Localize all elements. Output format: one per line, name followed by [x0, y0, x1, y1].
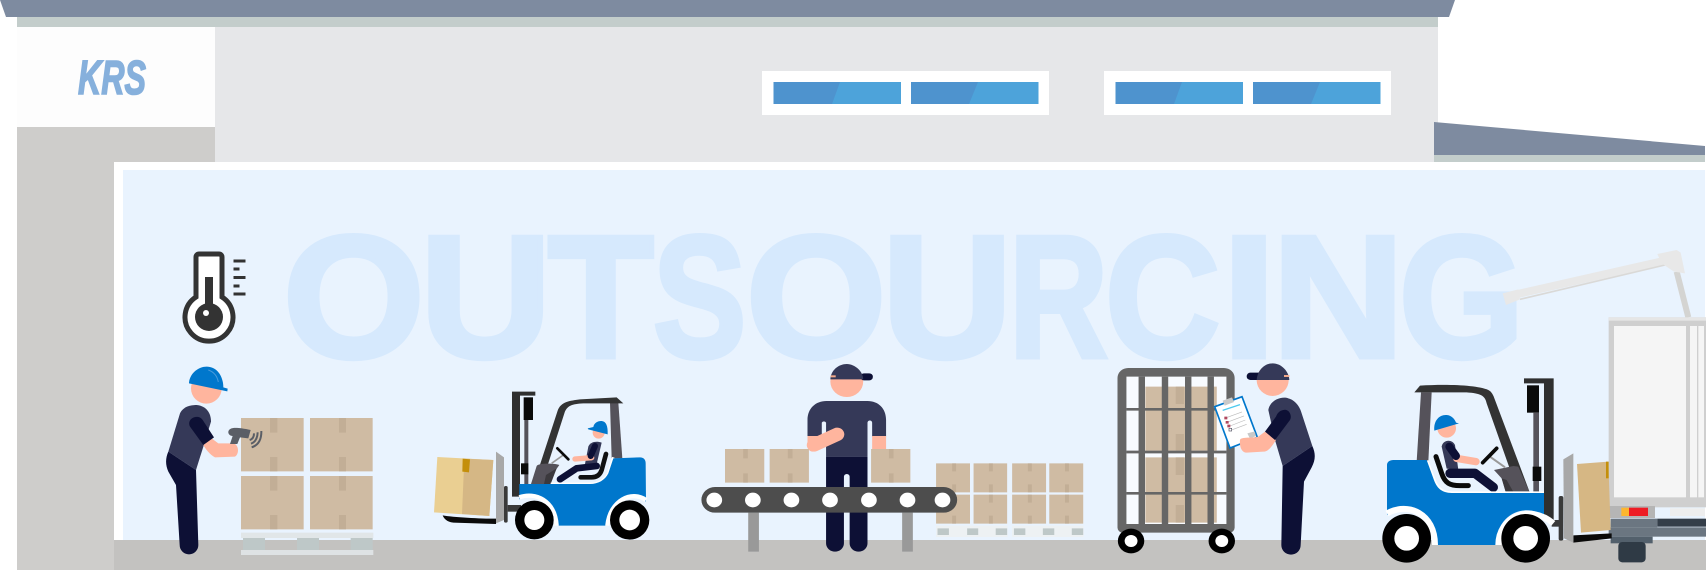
warehouse opening panel [114, 162, 1706, 542]
roll cage with boxes [1117, 368, 1235, 553]
conveyor station with worker [701, 364, 1235, 553]
mast [512, 392, 535, 497]
cab frame [531, 397, 623, 484]
second forklift load [1552, 453, 1612, 543]
right side: worker, forklift and truck [1215, 250, 1706, 563]
forklift carrying a box [434, 392, 649, 540]
second forklift wheels [1382, 514, 1550, 563]
conveyor legs [748, 513, 913, 552]
boxes on conveyor [725, 449, 910, 483]
fork and box [434, 452, 521, 524]
truck boom arm [1503, 250, 1688, 317]
worker with clipboard [1247, 363, 1315, 555]
floor [114, 540, 1706, 570]
second forklift mast [1524, 378, 1554, 522]
clipboard [1215, 397, 1257, 448]
barcode scanner [228, 428, 261, 447]
second forklift cab [1414, 385, 1530, 493]
box stacks on pallets [936, 463, 1084, 537]
truck [1609, 317, 1706, 562]
worker arm [1240, 410, 1291, 453]
left window [762, 71, 1049, 115]
worker figure [166, 367, 238, 554]
worker with barcode scanner and pallet [166, 367, 373, 555]
right window [1104, 71, 1391, 115]
forklift wheels [515, 500, 649, 540]
logo sign: KRS [17, 27, 215, 127]
forklift driver [560, 421, 608, 479]
second forklift driver [1434, 415, 1493, 487]
worker at conveyor [807, 364, 886, 552]
heading: OUTSOURCING [280, 200, 1525, 370]
logo sign: KRS: KRS [78, 52, 146, 105]
conveyor belt [701, 487, 957, 513]
forklift body [519, 457, 646, 526]
stacked boxes on pallet [241, 418, 373, 555]
icon: thermometer [185, 254, 246, 341]
second forklift body [1387, 460, 1553, 545]
